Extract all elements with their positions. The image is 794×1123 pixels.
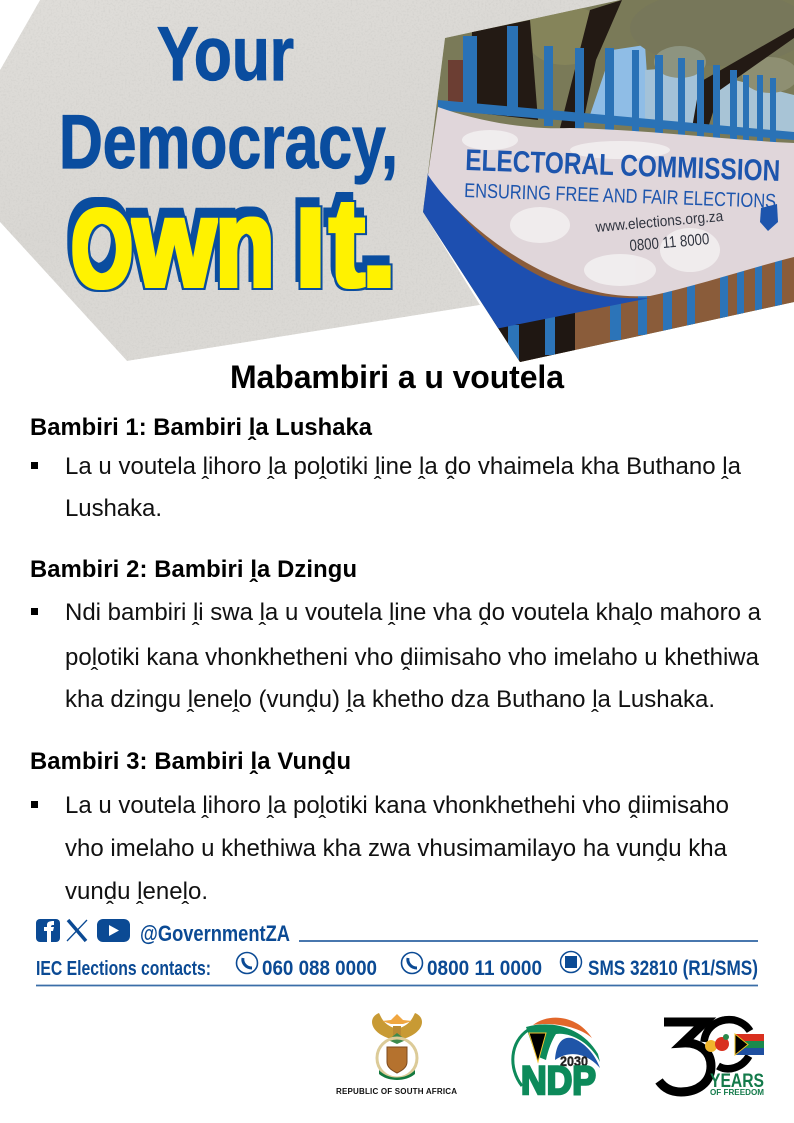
white banner [428,107,794,296]
icon: whatsapp [236,952,258,974]
photo: election banner on fence [420,0,794,365]
sky [590,45,794,135]
headline: Own It [71,174,398,313]
photo: election banner on fence: 0800 11 8000 [629,231,710,255]
green ring [513,1030,528,1086]
contacts label: IEC Elections contacts: [36,958,211,980]
hero banner [0,0,794,365]
people [705,1034,729,1052]
heading: Bambiri 2: Bambiri 2: Bambiri ḽa Dzingu [30,556,357,583]
text: Bambiri 1 body: Lushaka. [65,495,162,522]
phone number: whatsapp: 060 088 0000 [262,957,377,980]
photo: election banner on fence: www.elections.org.za [594,208,724,236]
logo: 30 years of freedom [659,1020,764,1097]
concrete background [0,0,619,361]
social handle: @GovernmentZA [140,921,290,946]
footer contact strip [36,919,758,986]
headline: Own It: O [71,187,133,311]
logo: 30 years of freedom: OF FREEDOM [710,1088,764,1097]
IEC logo [760,204,778,231]
headline: Your Democracy: Democracy, [59,100,398,185]
headline: Own It: I [295,186,326,310]
tree trunks [470,0,794,128]
sms number: SMS 32810 (R1/SMS) [588,957,758,980]
2030: 2030 [560,1053,588,1069]
tree foliage [530,8,794,93]
icon: phone [402,952,422,974]
bullet [31,801,38,808]
icon: facebook [36,919,60,942]
heading: Bambiri 3: Bambiri 3: Bambiri ḽa Vunḓu [30,748,351,775]
text: Bambiri 2 body: poḽotiki kana vhonkhetheni vho ḓiimisaho vho imelaho u khethiwa [65,644,760,671]
three [659,1022,711,1092]
ground [455,208,794,362]
blue banner band [423,170,650,330]
shield [387,1047,407,1073]
green flag band [526,1024,600,1062]
logo: coat of arms [372,1013,422,1080]
wings [372,1013,396,1040]
headline: Own It: w [132,174,217,313]
wreath [377,1038,417,1078]
flag [735,1034,764,1055]
black triangle [529,1033,546,1062]
headline: Own It: t [329,174,365,313]
orange arc [533,1018,592,1038]
fence [438,26,794,148]
text: Bambiri 2 body: Ndi bambiri ḽi swa ḽa u voutela ḽine vha ḓo voutela khaḽo mahoro a [65,599,762,626]
zero [704,1020,750,1069]
years label: YEARS [710,1071,764,1092]
text: Bambiri 2 body: kha dzingu ḽeneḽo (vunḓu) ḽa khetho dza Buthano ḽa Lushaka. [65,686,715,713]
motto ribbon [379,1070,415,1080]
bullet [31,462,38,469]
text: Bambiri 2 body [65,599,762,713]
headline: Your Democracy [59,12,398,185]
dark trunk base [492,313,575,362]
text: Bambiri 3 body: vho imelaho u khethiwa kha zwa vhusimamilayo ha vunḓu kha [65,835,728,862]
main heading: Mabambiri a u voutela [230,359,564,395]
text: Bambiri 1 body: La u voutela ḽihoro ḽa poḽotiki ḽine ḽa ḓo vhaimela kha Buthano ḽa [65,453,742,480]
phone number: toll free: 0800 11 0000 [427,957,542,980]
banner text [465,149,779,208]
section: Bambiri 2 [30,556,762,713]
NDP letters: NDP [521,1059,596,1103]
icon: X [67,920,87,941]
headline: Own It: n [215,174,275,313]
section: Bambiri 1 [30,414,742,522]
headline: Own It: . [360,174,398,313]
heading: Bambiri 1: Bambiri 1: Bambiri ḽa Lushaka [30,414,373,441]
text: Bambiri 3 body [65,792,729,905]
logo caption: REPUBLIC OF SOUTH AFRICA [336,1087,457,1096]
text: Bambiri 1 body [65,453,742,522]
text: Bambiri 3 body: vunḓu ḽeneḽo. [65,878,208,905]
bullet [31,608,38,615]
text: Bambiri 3 body: La u voutela ḽihoro ḽa poḽotiki kana vhonkhethehi vho ḓiimisaho [65,792,729,819]
headline: Your Democracy: Your [157,12,294,97]
blue arc [555,1038,600,1068]
logo: NDP 2030 [513,1018,600,1103]
section: Bambiri 3 [30,748,729,905]
icon: youtube [97,919,130,942]
icon: keypad [560,952,582,972]
